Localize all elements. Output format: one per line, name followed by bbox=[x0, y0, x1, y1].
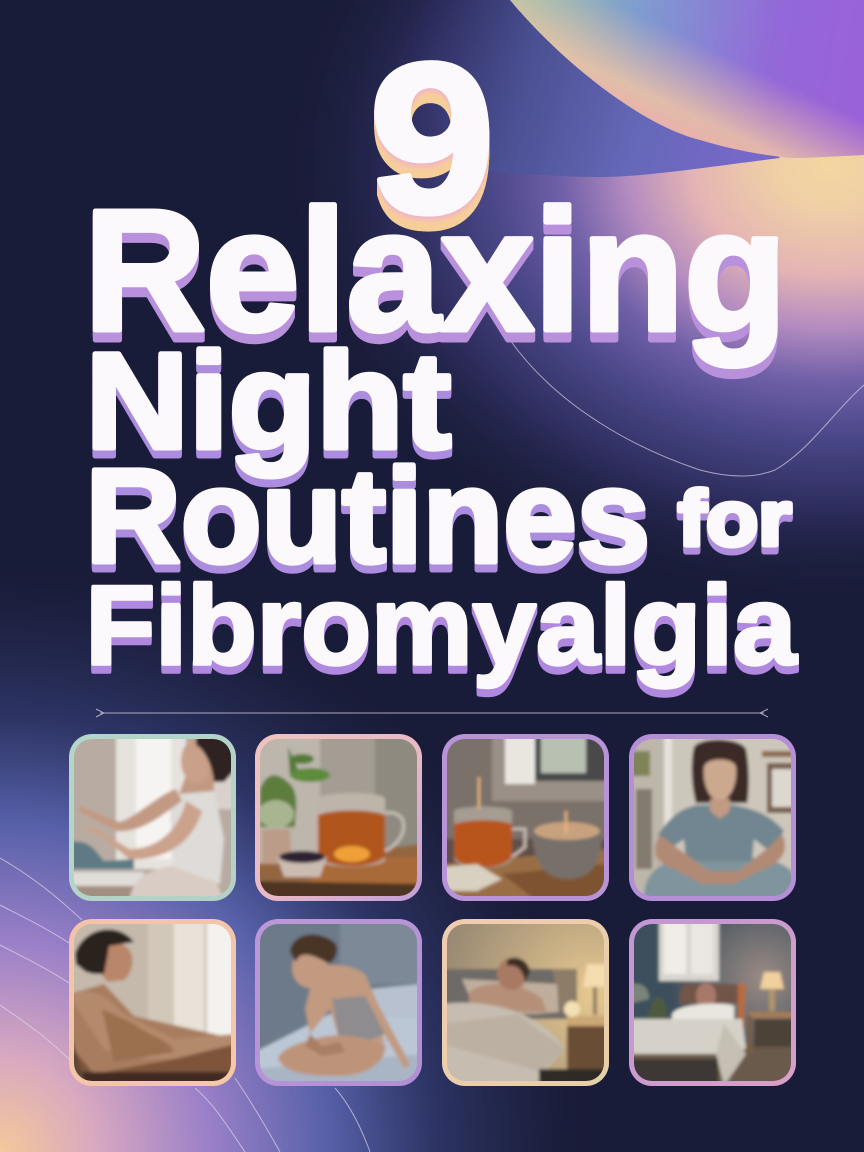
photo: seated woman with cushion bbox=[629, 734, 796, 901]
title: Routines: Routines bbox=[86, 442, 650, 591]
title: number 9: 9 bbox=[369, 18, 495, 258]
photo: herbal tea and plant bbox=[255, 734, 422, 901]
title: Fibromyalgia: Fibromyalgia bbox=[86, 563, 797, 688]
title bbox=[84, 18, 799, 698]
title: Relaxing: Relaxing bbox=[84, 174, 787, 367]
photo: woman resting with hands on abdomen bbox=[69, 919, 236, 1086]
photo: small bedroom at dusk bbox=[629, 919, 796, 1086]
title: Night: Night bbox=[86, 324, 451, 477]
photo: woman cross-legged on bed bbox=[255, 919, 422, 1086]
photo: person lying in warm-lit bed bbox=[442, 919, 609, 1086]
divider line bbox=[96, 708, 768, 718]
photo: seated arm stretch bbox=[69, 734, 236, 901]
title: for: for bbox=[678, 475, 791, 562]
photo: tea and warm bowl bbox=[442, 734, 609, 901]
